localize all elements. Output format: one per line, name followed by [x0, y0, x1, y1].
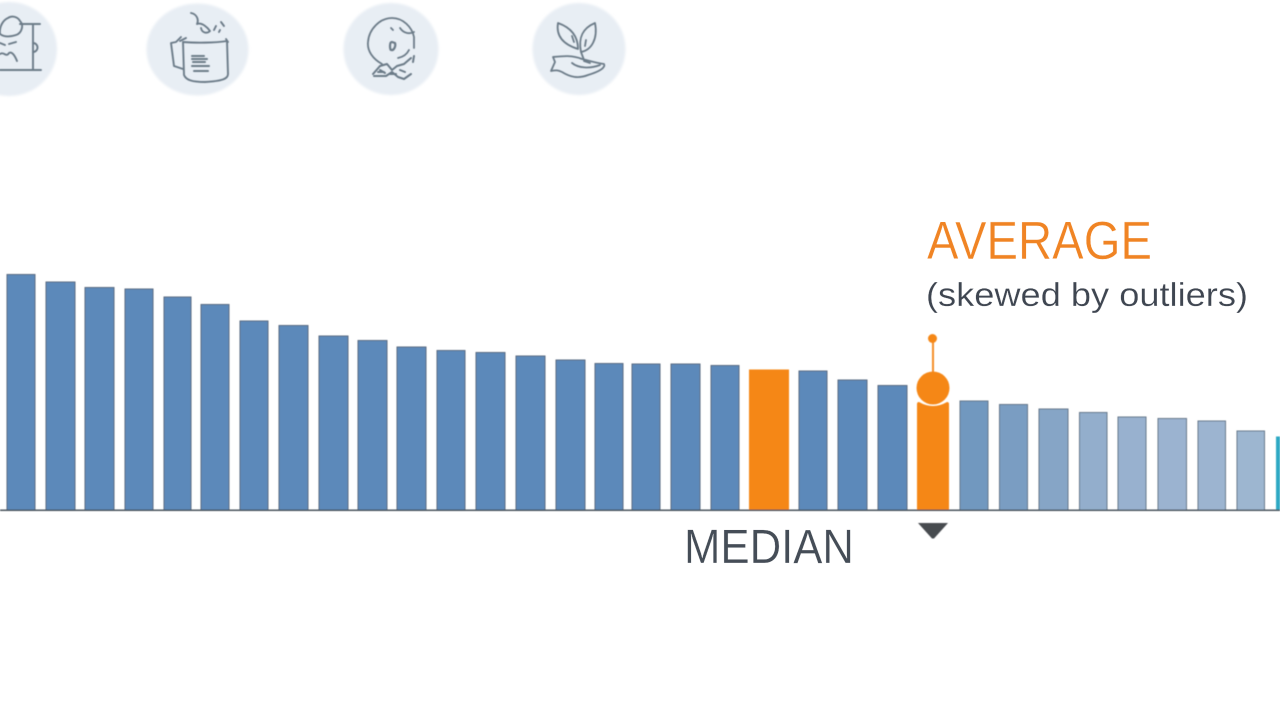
label: skewed by outliers: (skewed by outliers)	[926, 276, 1248, 313]
bars: fading group	[960, 401, 1264, 510]
bar chart: ranked values	[0, 274, 1280, 511]
bar: median	[749, 370, 789, 510]
icon: whiteboard with cloud	[0, 2, 57, 96]
icon: ring with debris	[344, 3, 438, 95]
bars: above average group	[7, 274, 907, 510]
marker: average pin	[916, 334, 950, 404]
baseline	[0, 510, 1280, 511]
label: average: AVERAGE	[927, 211, 1152, 271]
bar: average	[917, 402, 949, 510]
label: median: MEDIAN	[684, 521, 854, 574]
icon: plant in hand	[532, 3, 626, 95]
icon: mug with steam	[146, 4, 248, 96]
bar: teal outlier	[1276, 436, 1280, 510]
marker: average pointer triangle	[918, 523, 948, 538]
